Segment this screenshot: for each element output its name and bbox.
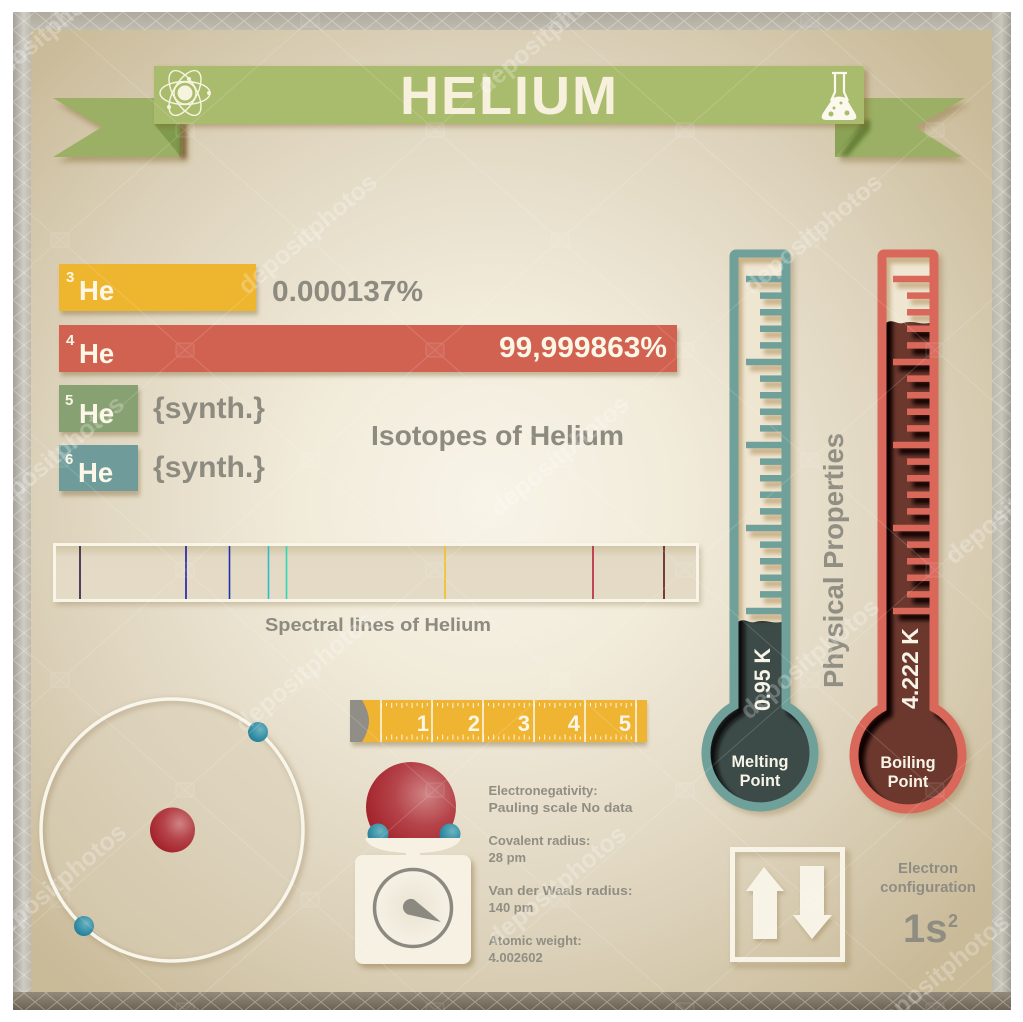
icon: measuring tape: 1 [417,711,429,736]
needle [403,899,441,922]
isotope bar: helium-6: He [78,457,113,488]
electron: upper [248,722,268,742]
arrow: spin down [793,866,834,942]
panel: electron configuration [880,860,976,951]
value: 0.95 K: 0.95 K [750,648,775,711]
spectrum lines [80,546,664,599]
caption: spectral lines of helium: Spectral lines of Helium [265,614,491,635]
electronegativity [488,783,633,815]
value: helium-6 synthetic: {synth.} [153,451,266,484]
value: 1s2: 2 [948,911,958,931]
thermometer: boiling point [850,250,972,820]
isotope bar: helium-4: 99,999863% [499,332,667,364]
atomic weight: 4.002602 [488,950,543,965]
isotope bar: helium-5: He [79,398,114,429]
tube interior [858,258,958,804]
thermometer: melting point [702,250,825,818]
watermark text: depositphotos [230,606,380,738]
icon: electron spin arrows [732,850,847,965]
panel: atom diagram [41,699,305,963]
watermark text: depositphotos [233,168,383,300]
van der waals radius: 140 pm [488,900,533,915]
panel: spectral lines [54,544,701,635]
icon: measuring tape: 3 [518,711,530,736]
isotope bar: helium-4 [59,325,679,376]
label: melting point: Melting [732,753,788,771]
heading: physical properties: Physical Properties [818,433,849,688]
panel: atomic properties [488,783,633,965]
nucleus [150,808,195,852]
title: HELIUM: HELIUM [400,66,617,126]
atomic weight: Atomic weight: [488,933,582,948]
electronegativity: Pauling scale No data [488,800,633,815]
electronegativity: Electronegativity: [488,783,598,798]
atomic weight [488,933,582,965]
weighed sphere [366,762,460,838]
arrow: spin up [746,867,786,942]
value: helium-3 abundance: 0.000137% [272,276,423,308]
isotope bar: helium-6 [59,445,140,496]
isotope bar: helium-3: 3 [66,269,74,286]
ribbon left tail [53,98,188,162]
van der waals radius [488,883,632,915]
covalent radius [488,833,590,865]
scale pan [365,838,461,855]
isotope bar: helium-5: 5 [65,392,73,409]
label: melting point [732,753,788,790]
isotope bar: helium-6: 6 [65,451,73,468]
value: 1s2: 1s [903,907,948,951]
isotope bar: helium-3 [59,264,258,315]
icon: measuring tape: 4 [568,711,581,736]
mercury [858,321,958,804]
isotope bar: helium-5 [59,385,140,436]
isotope bar: helium-4: He [79,338,114,369]
heading: isotopes of helium: Isotopes of Helium [371,420,624,451]
watermark text: depositphotos [738,168,888,300]
icon: atom [160,66,211,120]
title ribbon [53,66,970,162]
value: helium-5 synthetic: {synth.} [153,392,266,425]
icon: measuring tape: 2 [468,711,480,736]
isotope bar: helium-4: 4 [66,332,75,349]
label: electron configuration: Electron [898,860,958,877]
watermark text: depositphotos [735,593,885,725]
orbit ring [41,699,303,961]
icon: measuring tape: 5 [619,711,631,736]
electron: lower [74,916,94,936]
covalent radius: Covalent radius: [488,833,590,848]
label: electron configuration: configuration [880,879,976,896]
value: 4.222 K: 4.222 K [897,628,923,709]
isotope bar: helium-3: He [79,275,114,306]
label: boiling point: Boiling [880,754,936,772]
dial [374,870,452,946]
label: boiling point: Point [888,773,929,791]
scale body [355,855,471,964]
label: melting point: Point [740,772,781,790]
label: electron configuration [880,860,976,896]
icon: measuring tape [350,700,647,746]
watermark text: depositphotos [485,390,635,522]
panel: isotopes of helium [59,264,679,496]
tube interior [710,258,810,802]
ribbon right tail [835,98,970,162]
van der waals radius: Van der Waals radius: [488,883,632,898]
covalent radius: 28 pm [488,850,526,865]
icon: flask [822,73,856,120]
mercury [710,620,810,802]
watermark text: depositphotos [482,820,632,952]
label: boiling point [880,754,936,791]
icon: weighing scale [355,762,474,968]
